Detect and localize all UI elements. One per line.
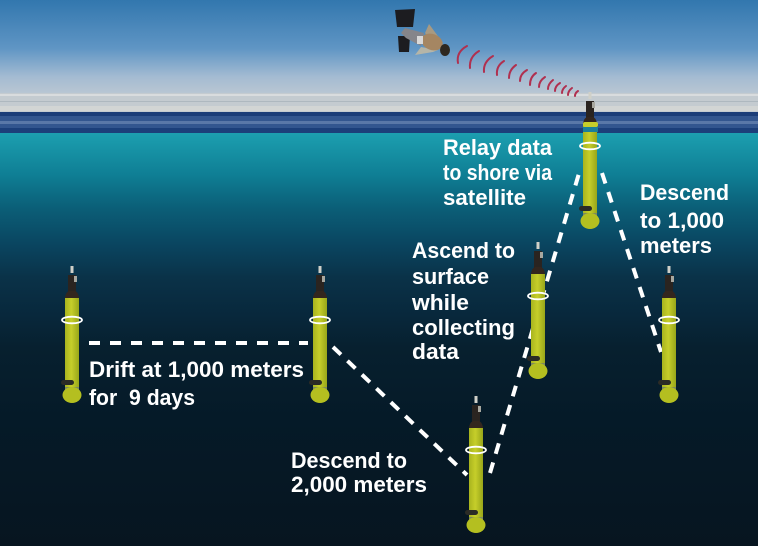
label: relay data: to shore via bbox=[443, 160, 553, 185]
label: drift: for 9 days bbox=[89, 385, 195, 410]
label: ascend to surface: data bbox=[412, 339, 460, 364]
float: ascending bbox=[527, 242, 548, 379]
label: drift: Drift at 1,000 meters bbox=[89, 357, 304, 382]
label: descend to 1000: meters bbox=[640, 233, 712, 258]
satellite bbox=[395, 9, 450, 56]
dashed path: drift bbox=[89, 341, 308, 345]
signal arcs bbox=[458, 46, 578, 96]
label: relay data: Relay data bbox=[443, 135, 553, 160]
label: ascend to surface: Ascend to bbox=[412, 238, 515, 263]
label: descend to 2000: 2,000 meters bbox=[291, 472, 427, 497]
float: drift end bbox=[309, 266, 330, 403]
float: surface bbox=[579, 92, 600, 229]
float: drift start bbox=[61, 266, 82, 403]
ocean surface band bbox=[0, 112, 758, 133]
dashed path: ascend bbox=[490, 170, 580, 473]
label: descend to 2000: Descend to bbox=[291, 448, 407, 473]
label: ascend to surface: surface bbox=[412, 264, 489, 289]
underwater gradient bbox=[0, 133, 758, 546]
float: deepest bbox=[465, 396, 486, 533]
float: surface collar at waterline bbox=[583, 122, 598, 132]
label: ascend to surface: while bbox=[411, 290, 469, 315]
label: relay data: satellite bbox=[443, 185, 526, 210]
label: descend to 1000: Descend bbox=[640, 180, 729, 205]
dashed path: descend to 2000 bbox=[333, 347, 467, 475]
label: descend to 1000: to 1,000 bbox=[640, 208, 724, 233]
horizon haze band bbox=[0, 93, 758, 112]
label: drift bbox=[89, 357, 304, 410]
label: ascend to surface: collecting bbox=[412, 315, 515, 340]
label: descend to 2000 bbox=[291, 448, 427, 497]
label: ascend to surface bbox=[411, 238, 515, 364]
dashed path: descend to 1000 bbox=[602, 173, 661, 352]
sky background bbox=[0, 0, 758, 96]
label: relay data bbox=[443, 135, 553, 210]
float: descending bbox=[658, 266, 679, 403]
label: descend to 1000 bbox=[640, 180, 729, 258]
